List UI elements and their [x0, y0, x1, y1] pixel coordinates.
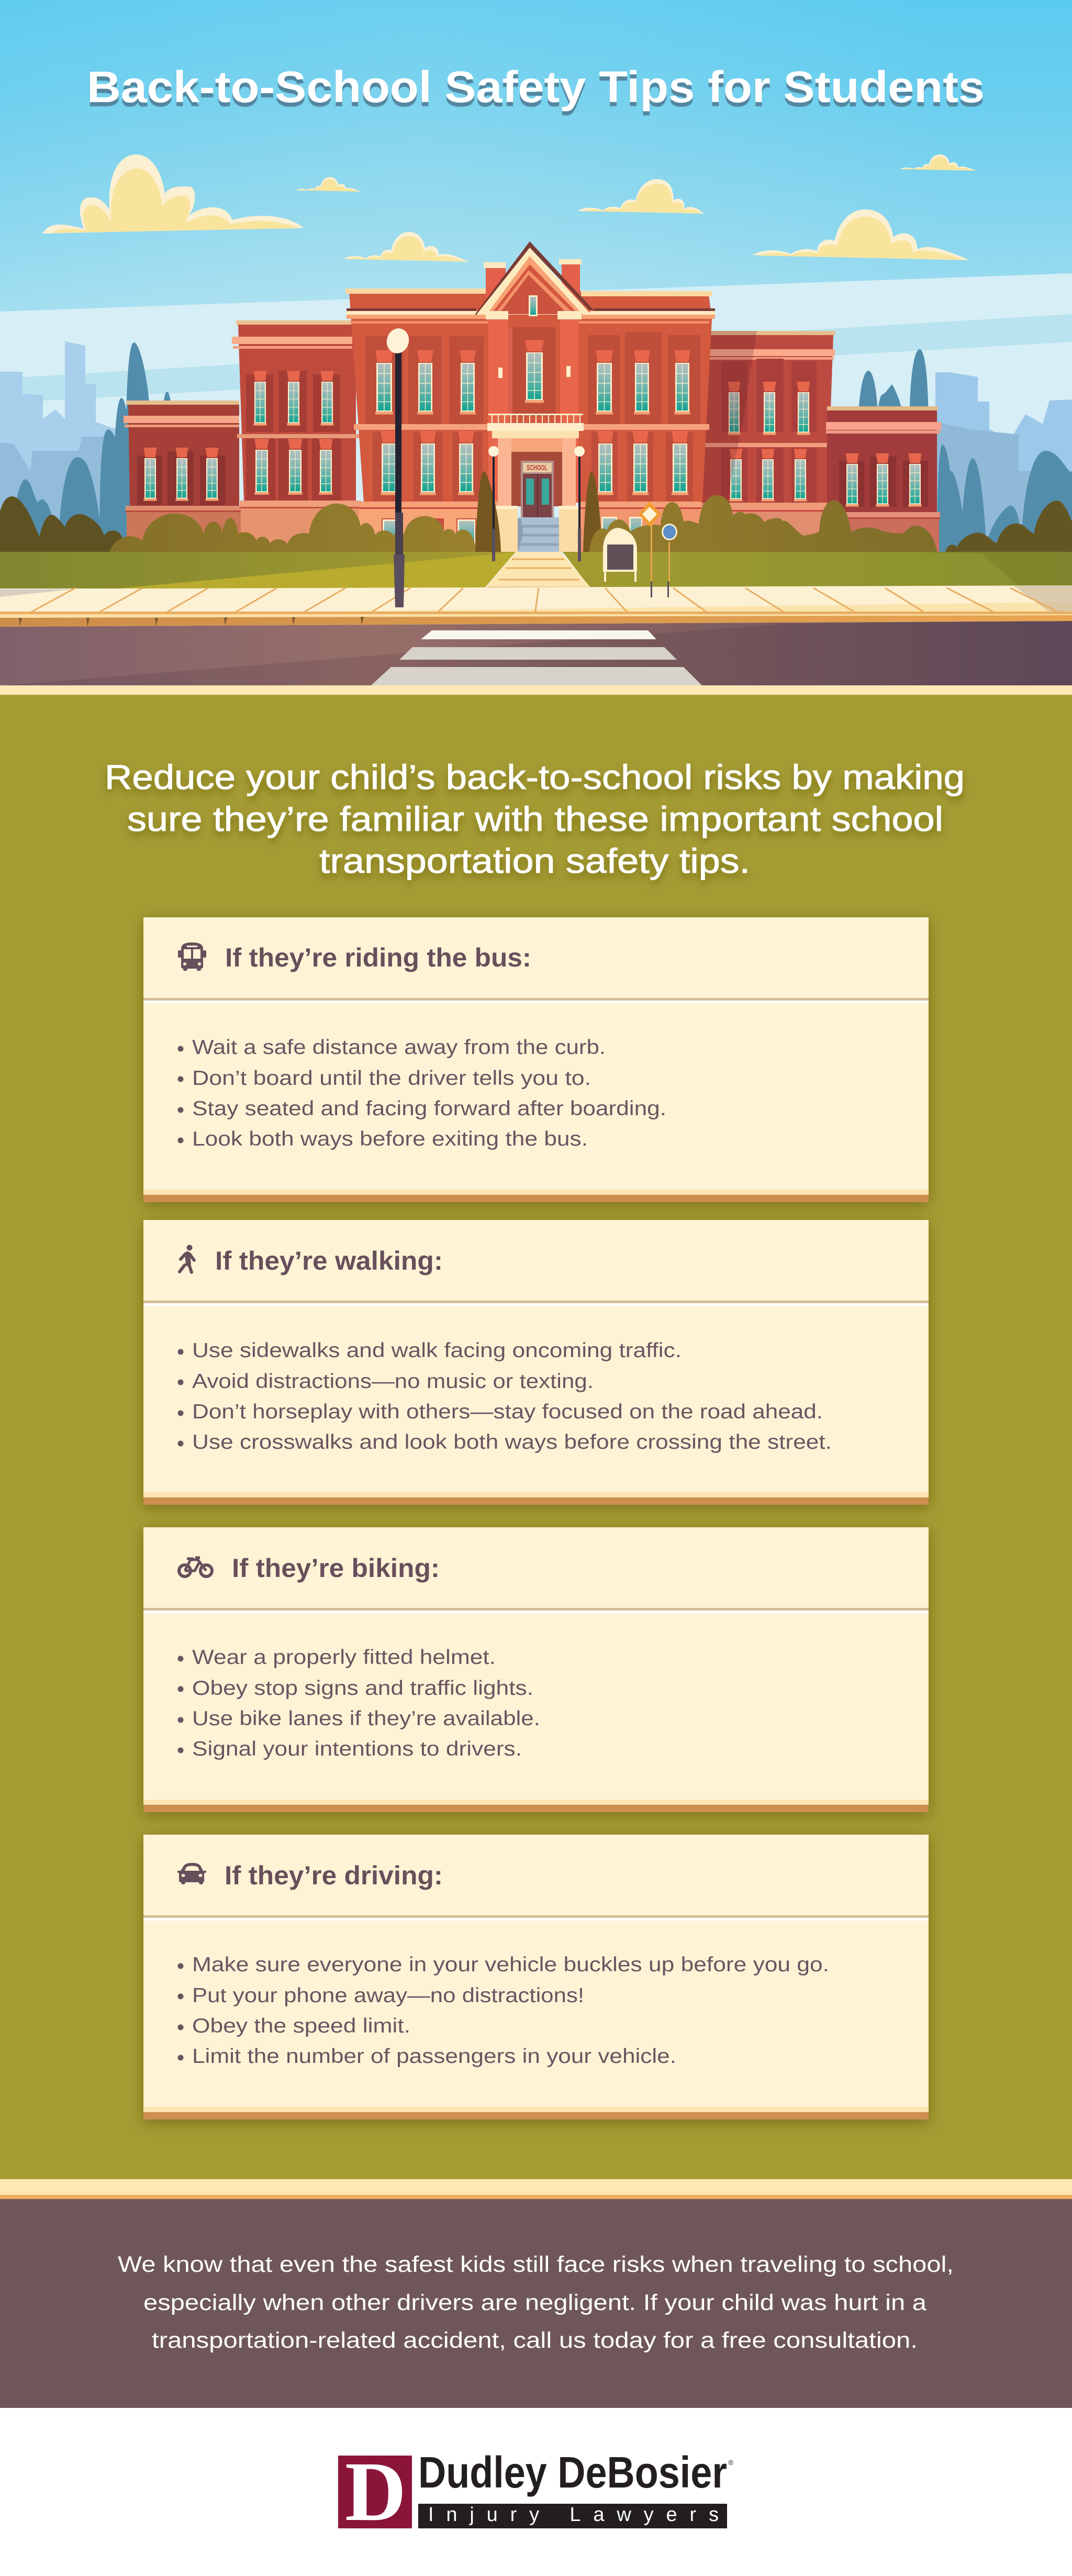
city skyline — [0, 341, 1072, 545]
bullet list: Obey the speed limit. — [192, 2015, 410, 2037]
bushes — [0, 471, 1072, 552]
sky — [0, 0, 1072, 555]
street lamps — [384, 326, 585, 607]
icon: bus — [178, 942, 206, 971]
path to door — [485, 552, 591, 589]
bullet list: Avoid distractions—no music or texting. — [192, 1370, 594, 1393]
road signs — [639, 502, 677, 597]
bullet list: Use crosswalks and look both ways before crossing the street. — [192, 1431, 832, 1453]
icon: walker — [180, 1245, 194, 1272]
heading: If they’re biking: — [232, 1553, 440, 1583]
crosswalk — [371, 630, 702, 685]
footer band — [0, 2179, 1072, 2408]
title: Back-to-School Safety Tips for Students — [87, 62, 985, 112]
bullet list: Wear a properly fitted helmet. — [192, 1646, 496, 1669]
road — [0, 621, 1072, 685]
bullet list: Use sidewalks and walk facing oncoming traffic. — [192, 1339, 682, 1362]
closing text — [118, 2252, 954, 2353]
balcony — [487, 414, 584, 438]
heading: If they’re walking: — [215, 1246, 443, 1275]
bullet list: Limit the number of passengers in your vehicle. — [192, 2045, 676, 2068]
bullet list — [178, 1339, 832, 1453]
upper bays — [366, 332, 700, 501]
clouds — [42, 154, 976, 262]
bullet list — [178, 1953, 829, 2068]
logo: Dudley DeBosier Injury Lawyers: Injury Lawyers — [428, 2504, 719, 2526]
central block — [345, 241, 715, 552]
windows — [375, 340, 690, 495]
sign: school: SCHOOL — [527, 463, 548, 472]
panel: biking — [143, 1527, 929, 1815]
right block — [701, 331, 835, 552]
sidewalk — [0, 585, 1072, 618]
entrance — [487, 414, 584, 552]
bullet list: Don’t horseplay with others—stay focused on the road ahead. — [192, 1401, 823, 1423]
illustration: school scene — [0, 0, 1072, 685]
left wing — [124, 401, 242, 552]
intro paragraph: Reduce your child’s back-to-school risks by making — [105, 758, 965, 796]
curb — [0, 615, 1072, 627]
closing text: transportation-related accident, call us today for a free consultation. — [152, 2328, 918, 2353]
left block — [232, 320, 361, 552]
chimneys — [484, 259, 582, 299]
bullet list: Wait a safe distance away from the curb. — [192, 1036, 606, 1059]
bullet list: Look both ways before exiting the bus. — [192, 1128, 588, 1150]
school building — [124, 241, 941, 552]
bullet list: Stay seated and facing forward after boarding. — [192, 1097, 666, 1120]
logo: Dudley DeBosier Injury Lawyers: ® — [728, 2458, 734, 2467]
closing text: We know that even the safest kids still face risks when traveling to school, — [118, 2252, 954, 2277]
panel: driving — [143, 1835, 929, 2123]
logo: Dudley DeBosier Injury Lawyers — [338, 2445, 734, 2539]
notice board — [603, 528, 637, 582]
logo: Dudley DeBosier Injury Lawyers: Dudley DeBosier — [418, 2448, 727, 2497]
cream band under illustration — [0, 685, 1072, 695]
bullet list — [178, 1646, 540, 1760]
right wing — [826, 406, 941, 552]
green content background — [0, 695, 1072, 2179]
logo: Dudley DeBosier Injury Lawyers: D — [345, 2445, 406, 2539]
closing text: especially when other drivers are negligent. If your child was hurt in a — [143, 2290, 926, 2315]
bullet list: Use bike lanes if they’re available. — [192, 1707, 540, 1730]
bullet list: Put your phone away—no distractions! — [192, 1984, 584, 2007]
intro paragraph: sure they’re familiar with these important school — [127, 800, 943, 838]
heading: If they’re driving: — [225, 1861, 443, 1890]
icon: car — [177, 1863, 206, 1884]
panel: walking — [143, 1220, 929, 1508]
intro paragraph: transportation safety tips. — [319, 841, 750, 880]
bullet list — [178, 1036, 666, 1150]
icon: bicycle — [179, 1558, 212, 1576]
lawn — [0, 552, 1072, 589]
bullet list: Signal your intentions to drivers. — [192, 1738, 522, 1760]
bullet list: Make sure everyone in your vehicle buckles up before you go. — [192, 1953, 829, 1976]
panel: riding the bus — [143, 917, 929, 1205]
heading: If they’re riding the bus: — [225, 943, 531, 972]
bullet list: Don’t board until the driver tells you to. — [192, 1067, 591, 1090]
gable — [475, 241, 594, 316]
intro paragraph — [105, 758, 965, 880]
bullet list: Obey stop signs and traffic lights. — [192, 1677, 533, 1700]
background trees — [10, 342, 1072, 552]
basement windows — [382, 517, 642, 545]
